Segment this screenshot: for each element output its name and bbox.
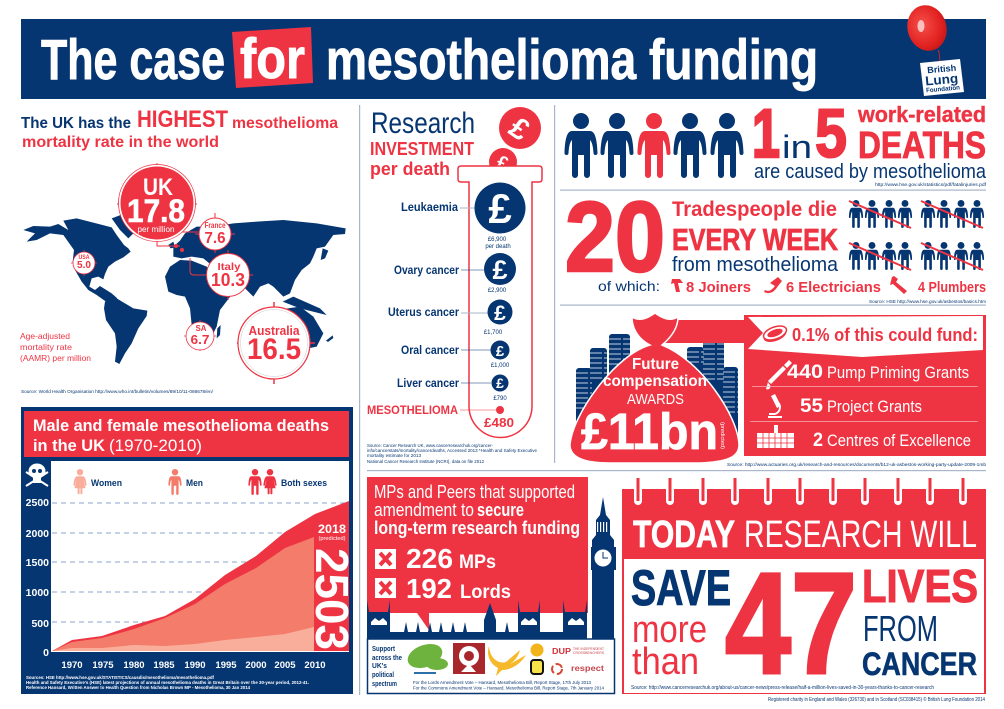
- callout: SA 6.7: SA: [196, 324, 207, 333]
- stat: 1 in 5: work-related: [857, 102, 986, 127]
- panel: 1 in 5 work-related deaths: [564, 95, 987, 187]
- source: [367, 443, 537, 465]
- x axis labels: [61, 660, 326, 671]
- stat: 1 in 5: are caused by mesothelioma: [754, 161, 987, 183]
- heading: today research will: TODAY: [633, 514, 735, 556]
- panel: MPs and Peers: [367, 477, 616, 694]
- x axis labels: 1975: [92, 660, 114, 671]
- x axis labels: 1985: [153, 660, 175, 671]
- test tube: [458, 166, 542, 438]
- legend: women: Women: [91, 478, 122, 489]
- title banner: The case: [41, 28, 225, 92]
- x axis labels: 1980: [123, 660, 145, 671]
- connector lines: [157, 232, 206, 275]
- text: save more than: more: [632, 609, 707, 651]
- political spectrum box: across the: [372, 655, 402, 662]
- source: National Cancer Research Institute (NCRI), data on file 2012: [367, 459, 484, 465]
- bar: mesothelioma: [367, 403, 514, 430]
- panel: deaths chart: [21, 407, 358, 694]
- panel: today research will calendar: [622, 476, 986, 704]
- stat: 1 in 5: in: [782, 129, 812, 165]
- callout: UK 17.8: per million: [138, 225, 174, 234]
- stat: 1 in 5: 1: [752, 95, 780, 172]
- x axis labels: 1990: [184, 660, 206, 671]
- political spectrum box: UK's: [372, 663, 387, 670]
- source: Source: HSE http://www.hse.gov.uk/asbestos/basics.htm: [869, 299, 986, 305]
- text: of which: of which:: [598, 278, 660, 294]
- bar: mesothelioma: MESOTHELIOMA: [367, 403, 458, 417]
- bar: mesothelioma: £480: [484, 416, 514, 430]
- logo: red rose: [453, 643, 485, 674]
- funding box: 2: [813, 430, 823, 451]
- bar: liver cancer: [397, 374, 508, 402]
- source: Source: http://www.cancerresearchuk.org/about-us/cancer-news/press-release/half-a-million-lives-saved-in-30-years-thanks-to-cancer-research: [631, 685, 934, 691]
- heading: UK has the highest mortality rate: HIGHEST: [137, 106, 228, 133]
- heading: UK has the highest mortality rate: The UK has the: [21, 115, 131, 132]
- y axis labels: 2000: [26, 528, 49, 540]
- logo: DUP and crossbenchers: CROSSBENCHERS: [573, 651, 605, 655]
- chart sources: Health and Safety Executive's (HSE) latest projections of annual mesothelioma deaths in Great Britain over the 30-year period, 2012-41.: [26, 680, 309, 685]
- political spectrum box: spectrum: [372, 681, 397, 688]
- callout: France 7.6: [195, 213, 235, 253]
- text: lives from cancer: FROM: [863, 608, 938, 649]
- bar: liver cancer: £: [496, 375, 504, 391]
- callout: Australia 16.5: [237, 302, 315, 384]
- bar: oral cancer: £: [496, 343, 505, 360]
- callout: Italy 10.3: Italy: [218, 262, 241, 273]
- callout: Italy 10.3: [203, 250, 253, 300]
- source: Source: World Health Organisation http://www.who.int/bulletin/volumes/89/10/11-086678/en/: [21, 389, 214, 395]
- title banner: mesothelioma funding: [326, 28, 818, 92]
- legend: both sexes: Both sexes: [281, 478, 327, 489]
- legend: both sexes: [248, 469, 327, 495]
- bar: oral cancer: Oral cancer: [401, 345, 459, 357]
- callout: USA 5.0: 5.0: [77, 260, 91, 271]
- source: info/cancerstats/mortality/cancerdeaths, Accessed 2013 *Health and Safety Executive: [367, 448, 537, 454]
- x axis labels: 1970: [61, 660, 83, 671]
- x axis labels: 2005: [274, 660, 296, 671]
- plumbers: [890, 276, 986, 296]
- callout: USA 5.0: [71, 250, 97, 276]
- text: tradespeople die every week: Tradespeople die: [672, 198, 837, 221]
- logo: SNP: [531, 660, 543, 674]
- text: save more than: [631, 560, 731, 683]
- political spectrum box: Support: [372, 646, 396, 653]
- callout: France 7.6: 7.6: [204, 230, 226, 247]
- icon: falling red coins: £: [503, 111, 536, 148]
- logo: respect: respect: [571, 663, 604, 673]
- funding box: Centres of Excellence: [827, 431, 971, 450]
- votes source: [413, 680, 604, 692]
- x axis labels: 1995: [215, 660, 237, 671]
- chart heading: Male and female mesothelioma deaths: [33, 416, 329, 435]
- dividers: [359, 105, 986, 695]
- political spectrum box: [368, 639, 614, 694]
- logo: green tree: [404, 640, 448, 674]
- callout box: secure: [477, 500, 524, 520]
- text: lives from cancer: LIVES: [862, 560, 978, 612]
- money bag: (predicted): [719, 422, 725, 449]
- stat: 47: 47: [725, 543, 857, 704]
- predicted 2018 label: 2018: [318, 522, 346, 536]
- logo: DUP and crossbenchers: [552, 647, 605, 656]
- predicted 2018 label: (predicted): [318, 536, 346, 542]
- money bag: [570, 313, 739, 463]
- logo: DUP and crossbenchers: THE INDEPENDENT: [573, 647, 605, 651]
- callout: Australia 16.5: 16.5: [247, 333, 301, 366]
- callout: France 7.6: France: [204, 221, 226, 230]
- chart sources: Reference Hansard, Written Answer to Health Question from Nicholas Brown MP - Mesothelioma, 30 Jan 2014: [26, 685, 250, 690]
- icon: crossed-out people: [849, 200, 984, 270]
- stat: Lords: Lords: [460, 582, 511, 603]
- logo: British Lung Foundation balloon: British: [927, 63, 957, 75]
- stat: MPs: 226: [406, 543, 453, 574]
- y axis labels: 2500: [26, 497, 49, 509]
- panel: 20 tradespeople: [565, 181, 986, 305]
- x axis labels: 2010: [304, 660, 326, 671]
- logo: British Lung Foundation balloon: Foundation: [926, 84, 960, 94]
- bar: ovary cancer: [394, 253, 516, 294]
- bar: leukaemia: £: [488, 185, 512, 232]
- political spectrum box: political: [372, 672, 394, 679]
- title banner: for: [240, 27, 305, 91]
- funding box: 55: [800, 396, 823, 417]
- text: save more than: SAVE: [631, 560, 731, 616]
- money bag: £11bn: [581, 403, 718, 460]
- text: lives from cancer: [862, 560, 978, 682]
- bar: uterus cancer: Uterus cancer: [388, 307, 459, 319]
- world map: [23, 214, 346, 364]
- votes source: For the Lords Amendment Vote – Hansard, Mesothelioma Bill, Report Stage, 17th July 2013: [413, 680, 591, 686]
- area chart: [51, 461, 349, 652]
- chart sources: [26, 675, 309, 690]
- logo: daffodil: [530, 644, 544, 656]
- bar: leukaemia: per death: [485, 244, 511, 250]
- heading: research investment: Research: [371, 107, 475, 140]
- icon: falling red coins: [489, 107, 541, 176]
- chart heading: (1970-2010): [109, 436, 202, 455]
- stat: Lords: 192: [406, 573, 452, 604]
- money bag: Future: [632, 356, 679, 373]
- y axis labels: 500: [31, 618, 49, 630]
- text: save more than: than: [632, 641, 699, 683]
- callout: UK 17.8: 17.8: [127, 193, 185, 229]
- stat: MPs: [375, 543, 496, 574]
- bar: leukaemia: £6,900: [488, 237, 507, 243]
- heading: research investment: INVESTMENT: [370, 139, 474, 159]
- joiners: 8 Joiners: [686, 279, 751, 296]
- callout box: long-term research funding: [374, 518, 580, 538]
- legend: men: [168, 469, 203, 495]
- heading: today research will: [633, 514, 977, 556]
- icon: coin stacks: [576, 334, 738, 437]
- funding box: Project Grants: [827, 397, 922, 416]
- text: map key: [20, 331, 91, 363]
- stat: Lords: [375, 573, 511, 604]
- callout: Italy 10.3: 10.3: [211, 270, 245, 290]
- y axis labels: 1000: [26, 587, 49, 599]
- y axis labels: 0: [43, 647, 49, 659]
- bar: uterus cancer: [388, 300, 512, 336]
- panel: future compensation: [570, 313, 986, 468]
- text: map key: Age-adjusted: [20, 331, 70, 341]
- y axis labels: [26, 497, 49, 659]
- stat: MPs: MPs: [459, 552, 496, 573]
- predicted 2018 label: 2503: [306, 548, 358, 650]
- skyline: parliament and Big Ben: [367, 497, 616, 640]
- icon: skull and crossbones: [26, 464, 48, 486]
- chart heading: in the UK: [33, 436, 106, 455]
- heading: research investment: per death: [370, 159, 450, 179]
- bar: oral cancer: £1,000: [491, 363, 510, 369]
- callout: SA 6.7: 6.7: [190, 332, 210, 347]
- x axis labels: 2000: [245, 660, 267, 671]
- icon: coin: [762, 323, 788, 345]
- logo: yellow bird: [488, 646, 526, 676]
- heading: UK has the highest mortality rate: mesothelioma: [232, 115, 338, 132]
- y axis labels: 1500: [26, 557, 49, 569]
- callout box: amendment to: [374, 500, 474, 520]
- logo: spiral: [552, 664, 562, 674]
- stat: 1 in 5: http://www.hse.gov.uk/statistics/pdf/fatalinjuries.pdf: [875, 182, 987, 187]
- callout: UK 17.8: [117, 163, 197, 243]
- logo: British Lung Foundation balloon: Lung: [925, 71, 959, 88]
- title banner: [21, 19, 986, 99]
- text: tradespeople die every week: [672, 198, 839, 276]
- source: Source: http://www.actuaries.org.uk/research-and-resources/documents/b12-uk-asbestos-working-party-update-2009-1mb: [727, 462, 986, 468]
- money bag: AWARDS: [627, 391, 684, 408]
- bar: ovary cancer: Ovary cancer: [394, 265, 459, 277]
- funding box: 440: [787, 362, 823, 383]
- legend: men: Men: [186, 478, 203, 489]
- electricians: 6 Electricians: [786, 279, 881, 296]
- chart heading: [24, 411, 349, 457]
- bar: uterus cancer: £: [494, 302, 506, 325]
- logo: DUP and crossbenchers: DUP: [552, 647, 572, 656]
- heading: UK has the highest mortality rate: [21, 106, 338, 151]
- bar: ovary cancer: £: [492, 255, 508, 285]
- stat: 20: 20: [565, 181, 665, 292]
- callout: SA 6.7: [184, 320, 216, 351]
- source: Source: Cancer Research UK, www.cancerresearchuk.org/cancer-: [367, 443, 493, 449]
- logo: British Lung Foundation balloon: [902, 1, 964, 96]
- heading: research investment: [370, 107, 475, 179]
- chart sources: Sources: HSE http://www.hse.gov.uk/STATISTICS/causdis/mesothelioma/mesothelioma.pdf: [26, 675, 214, 680]
- panel: research investment per death: [367, 107, 542, 465]
- icon: microscope: [768, 394, 782, 418]
- bar: uterus cancer: £1,700: [484, 330, 503, 336]
- bar: liver cancer: £790: [493, 396, 507, 402]
- stat: 1 in 5: [752, 95, 987, 187]
- votes source: For the Commons Amendment Vote – Hansard, Mesothelioma Bill, Report Stage, 7th January 2014: [413, 686, 604, 692]
- plumbers: 4 Plumbers: [918, 279, 986, 296]
- panel: highest mortality rate map: [20, 106, 346, 395]
- text: map key: (AAMR) per million: [20, 353, 91, 363]
- bar: oral cancer: [401, 340, 510, 369]
- callout box: [367, 477, 588, 630]
- icon: building: [757, 425, 794, 448]
- stat: 1 in 5: 5: [815, 95, 847, 172]
- text: tradespeople die every week: EVERY WEEK: [672, 222, 838, 257]
- heading: UK has the highest mortality rate: mortality rate in the world: [22, 134, 219, 151]
- callout: Australia 16.5: Australia: [248, 323, 300, 338]
- funding box: Pump Priming Grants: [827, 363, 969, 382]
- source: mortality estimate for 2013: [367, 453, 421, 459]
- legend: women: [73, 469, 122, 494]
- calendar rings: [634, 476, 967, 505]
- bar: leukaemia: [401, 182, 526, 250]
- callout box: MPs and Peers that supported: [374, 482, 575, 502]
- icon: falling red coins: £: [493, 152, 511, 176]
- funding box: [660, 315, 986, 456]
- bar: ovary cancer: £2,900: [488, 288, 507, 294]
- text: lives from cancer: CANCER: [862, 646, 977, 682]
- callout: USA 5.0: USA: [78, 255, 90, 261]
- text: tradespeople die every week: from mesothelioma: [672, 254, 839, 276]
- callout: UK 17.8: UK: [143, 174, 174, 201]
- bar: liver cancer: Liver cancer: [397, 378, 459, 390]
- bar: leukaemia: Leukaemia: [401, 202, 459, 214]
- icon: five people: [564, 113, 744, 178]
- money bag: compensation: [603, 373, 707, 390]
- text: map key: mortality rate: [20, 342, 72, 352]
- funding box: 0.1% of this could fund:: [792, 325, 978, 345]
- icon: pipette: [766, 360, 792, 389]
